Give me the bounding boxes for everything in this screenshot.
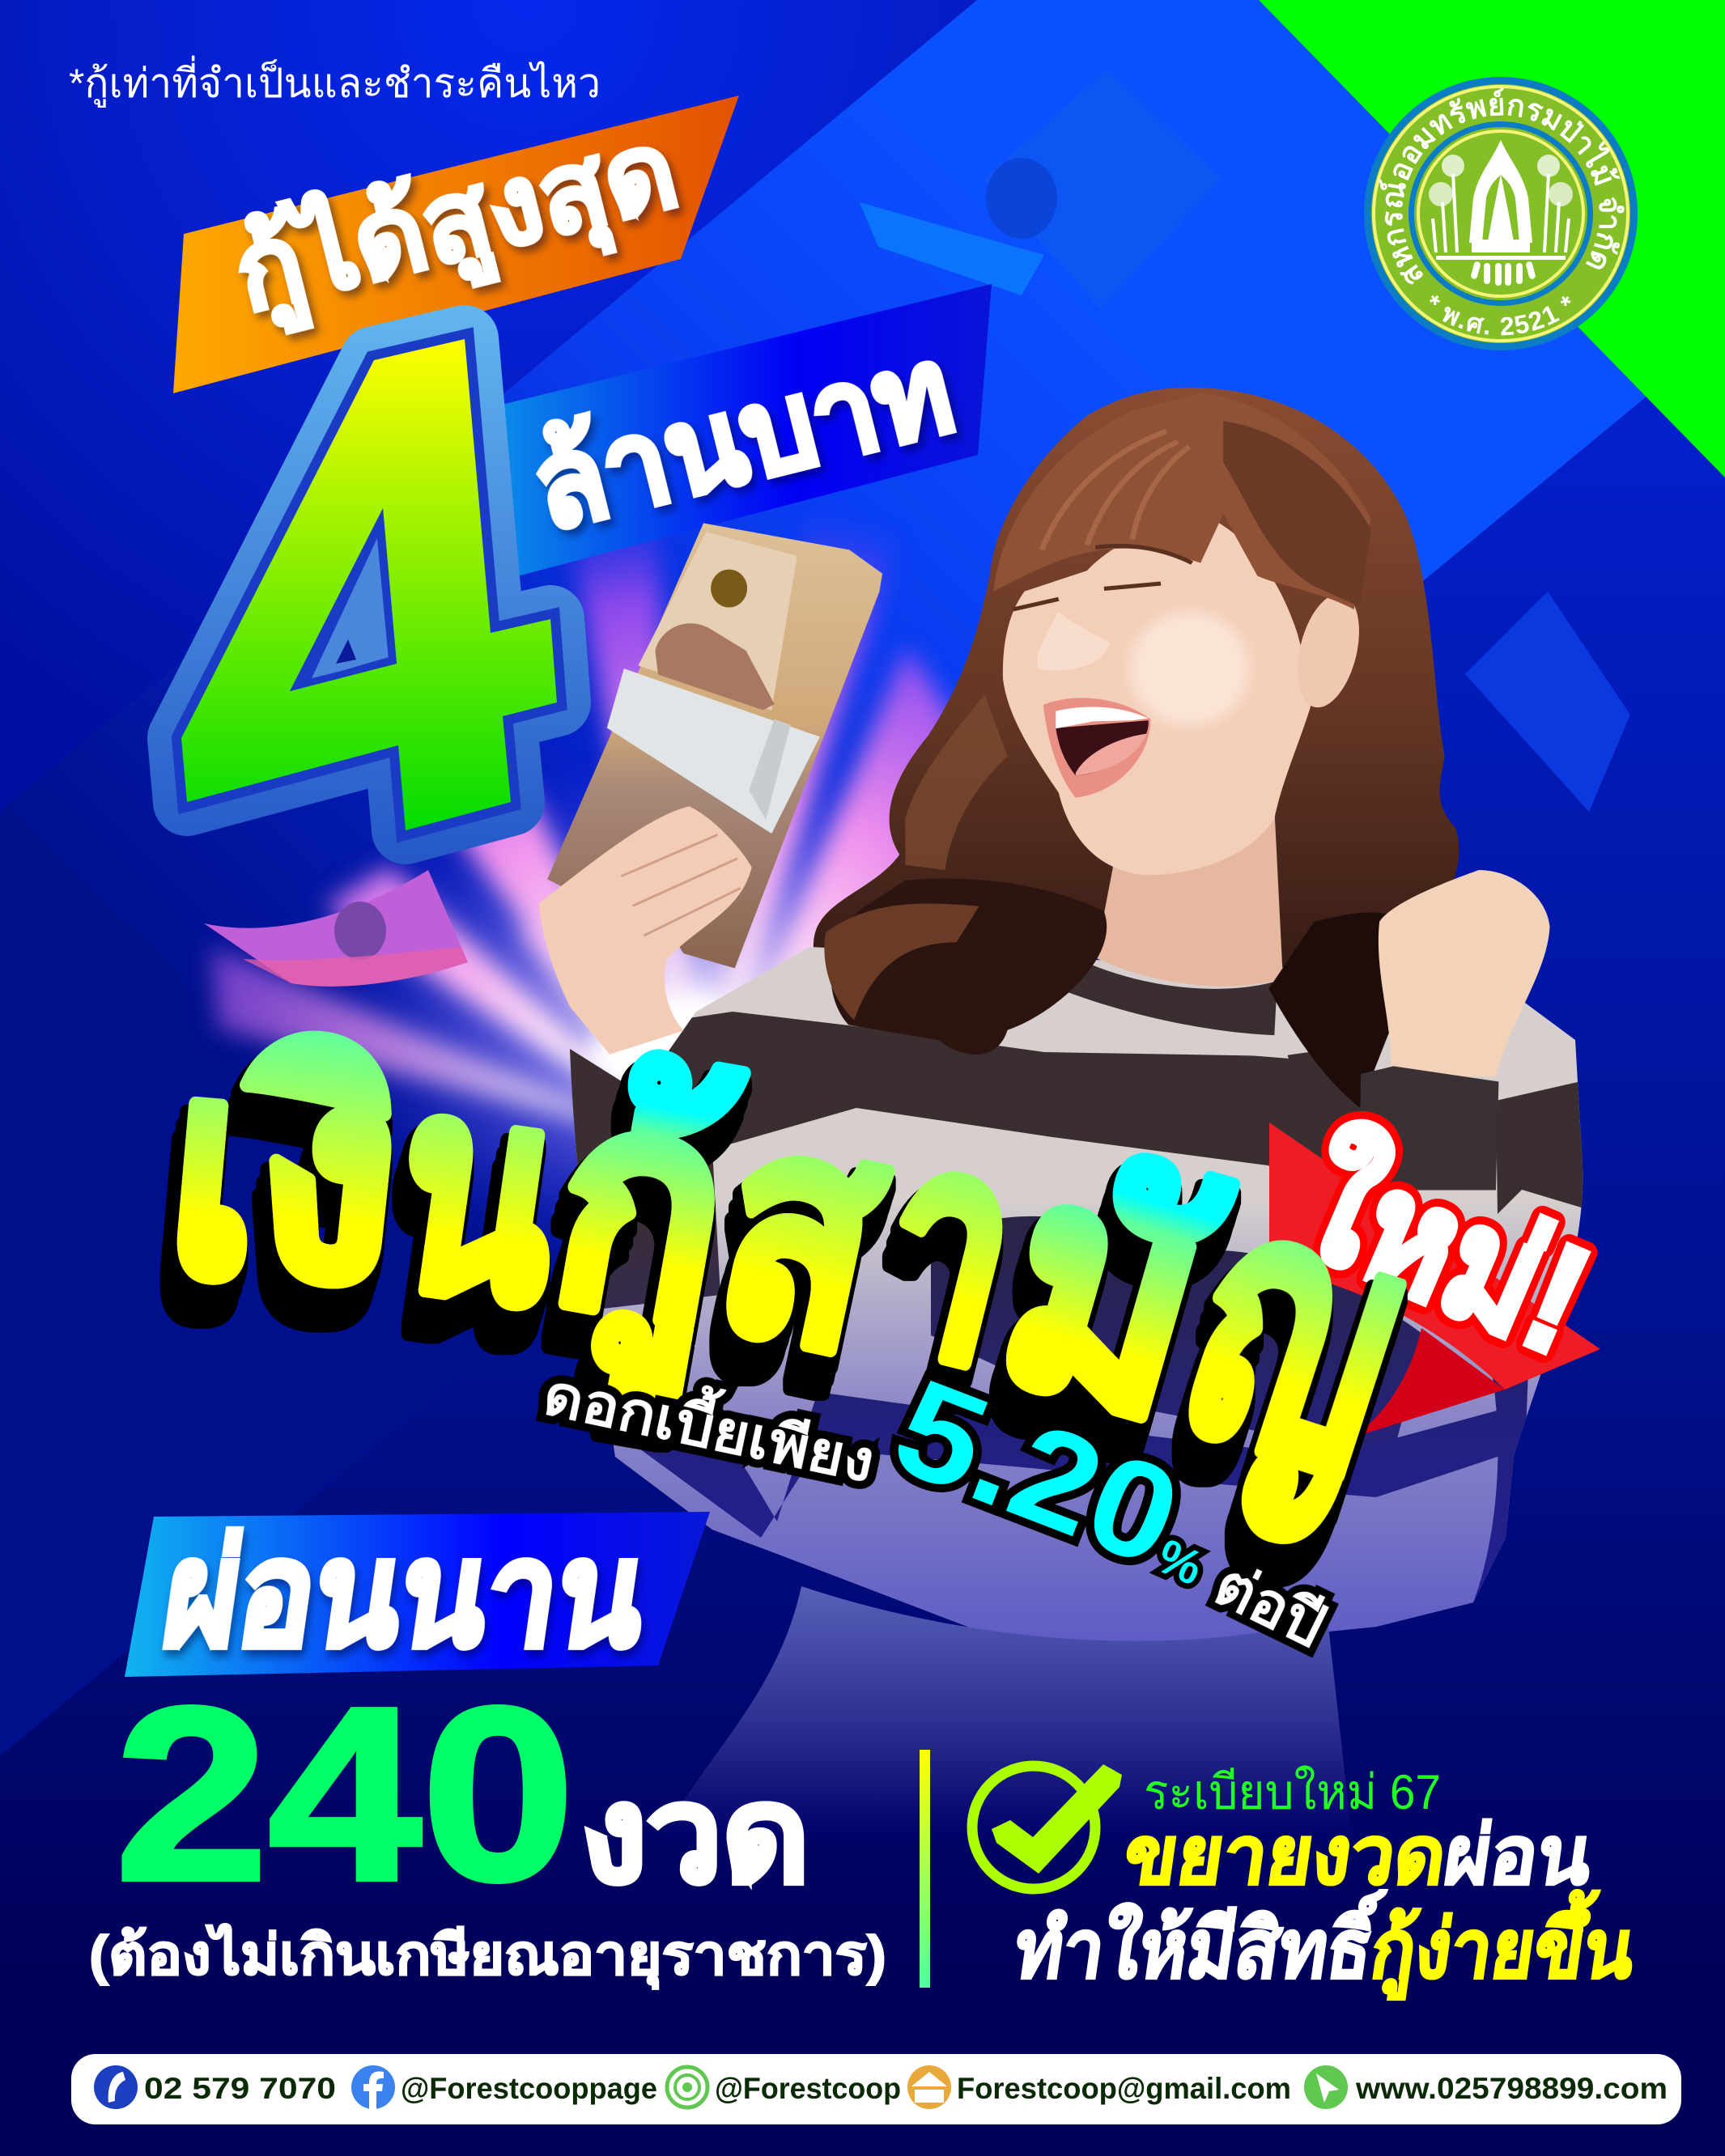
headline: ordinary loan: า — [851, 1072, 1049, 1425]
neck and collar — [1042, 808, 1289, 1059]
headline: ordinary loan: น — [380, 1024, 578, 1363]
million baht text: ล้านบาท — [520, 320, 965, 555]
email address: Forestcoop@gmail.com — [957, 2072, 1291, 2105]
eyebrows and eyes — [1013, 545, 1192, 609]
woman illustration — [559, 388, 1603, 1837]
new text: ใหม่! — [1276, 1113, 1612, 1386]
rate value: 5.20 — [876, 1349, 1199, 1596]
raised fist and cuff — [1360, 870, 1550, 1190]
retirement condition: (ต้องไม่เกินเกษียณอายุราชการ) — [89, 1923, 886, 1989]
ear — [1287, 588, 1370, 712]
banner: million baht — [502, 284, 992, 576]
money stack and hand — [539, 523, 882, 1055]
icon: web — [1304, 2065, 1348, 2109]
website: www.025798899.com — [1355, 2072, 1668, 2105]
big number 4 — [181, 339, 557, 830]
installment unit: งวด — [581, 1760, 809, 1909]
interest label: ดอกเบี้ยเพียง — [538, 1352, 882, 1494]
banknote: right faded — [1465, 592, 1630, 812]
logo seal — [1364, 77, 1638, 350]
seal emblem — [1429, 140, 1573, 286]
seal ring text: สหกรณ์ออมทรัพย์กรมป่าไม้ จำกัด — [1379, 87, 1625, 285]
headline: ordinary loan: เ — [159, 1009, 271, 1336]
easier to qualify: ทำให้มีสิทธิ์กู้ง่ายขึ้น — [1009, 1890, 1642, 2000]
new text: ใหม่! — [1276, 1113, 1612, 1386]
bangs and upper hair — [993, 393, 1371, 609]
seal year text: * พ.ศ. 2521 * — [1430, 295, 1570, 335]
installment count: 240 — [115, 1656, 575, 1932]
mouth — [1043, 698, 1150, 798]
per year: ต่อปี — [1205, 1550, 1336, 1660]
sweater — [559, 939, 1603, 1667]
lower hair curls — [831, 879, 1107, 1055]
contact bar — [71, 2054, 1681, 2124]
icon: line — [667, 2067, 707, 2107]
headline: ordinary loan — [159, 1008, 1446, 1555]
headline: ordinary loan: กู้ — [531, 1029, 752, 1406]
banknote: top blue — [860, 69, 1222, 309]
headline: ordinary loan: ญ — [1148, 1125, 1446, 1555]
disclaimer text: *กู้เท่าที่จำเป็นและชำระคืนไหว — [69, 56, 601, 108]
phone number: 02 579 7070 — [144, 2072, 336, 2105]
banner: long repayment — [125, 1512, 710, 1677]
hair back — [814, 388, 1459, 1107]
facebook handle: @Forestcooppage — [401, 2072, 657, 2105]
new regulation: ระเบียบใหม่ 67 — [1144, 1765, 1441, 1819]
light rays — [210, 518, 1077, 1279]
nose — [1037, 612, 1110, 671]
icon: email — [907, 2065, 951, 2109]
pants — [664, 1586, 1352, 1837]
face — [824, 393, 1434, 1107]
green corner triangle — [1259, 0, 1725, 477]
hand — [539, 806, 752, 1055]
banner title text: กู้ได้สูงสุด — [223, 104, 690, 342]
interest rate line — [538, 1349, 1336, 1660]
icon: phone — [94, 2065, 138, 2109]
icon: facebook — [351, 2065, 395, 2109]
long repayment text: ผ่อนนาน — [155, 1513, 656, 1676]
headline: ordinary loan: ส — [696, 1055, 908, 1412]
check icon — [972, 1764, 1122, 1889]
percent sign: % — [1149, 1529, 1211, 1596]
extend installments: ขยายงวดผ่อน — [1119, 1810, 1598, 1901]
line handle: @Forestcoop — [715, 2072, 901, 2105]
headline: ordinary loan: งิ — [219, 1008, 414, 1343]
banner: maximum loan — [173, 95, 739, 393]
divider bar — [920, 1750, 930, 1988]
banknote: pink — [204, 870, 468, 987]
headline: ordinary loan: มั — [971, 1108, 1243, 1480]
ribbon: new — [1269, 1113, 1612, 1437]
